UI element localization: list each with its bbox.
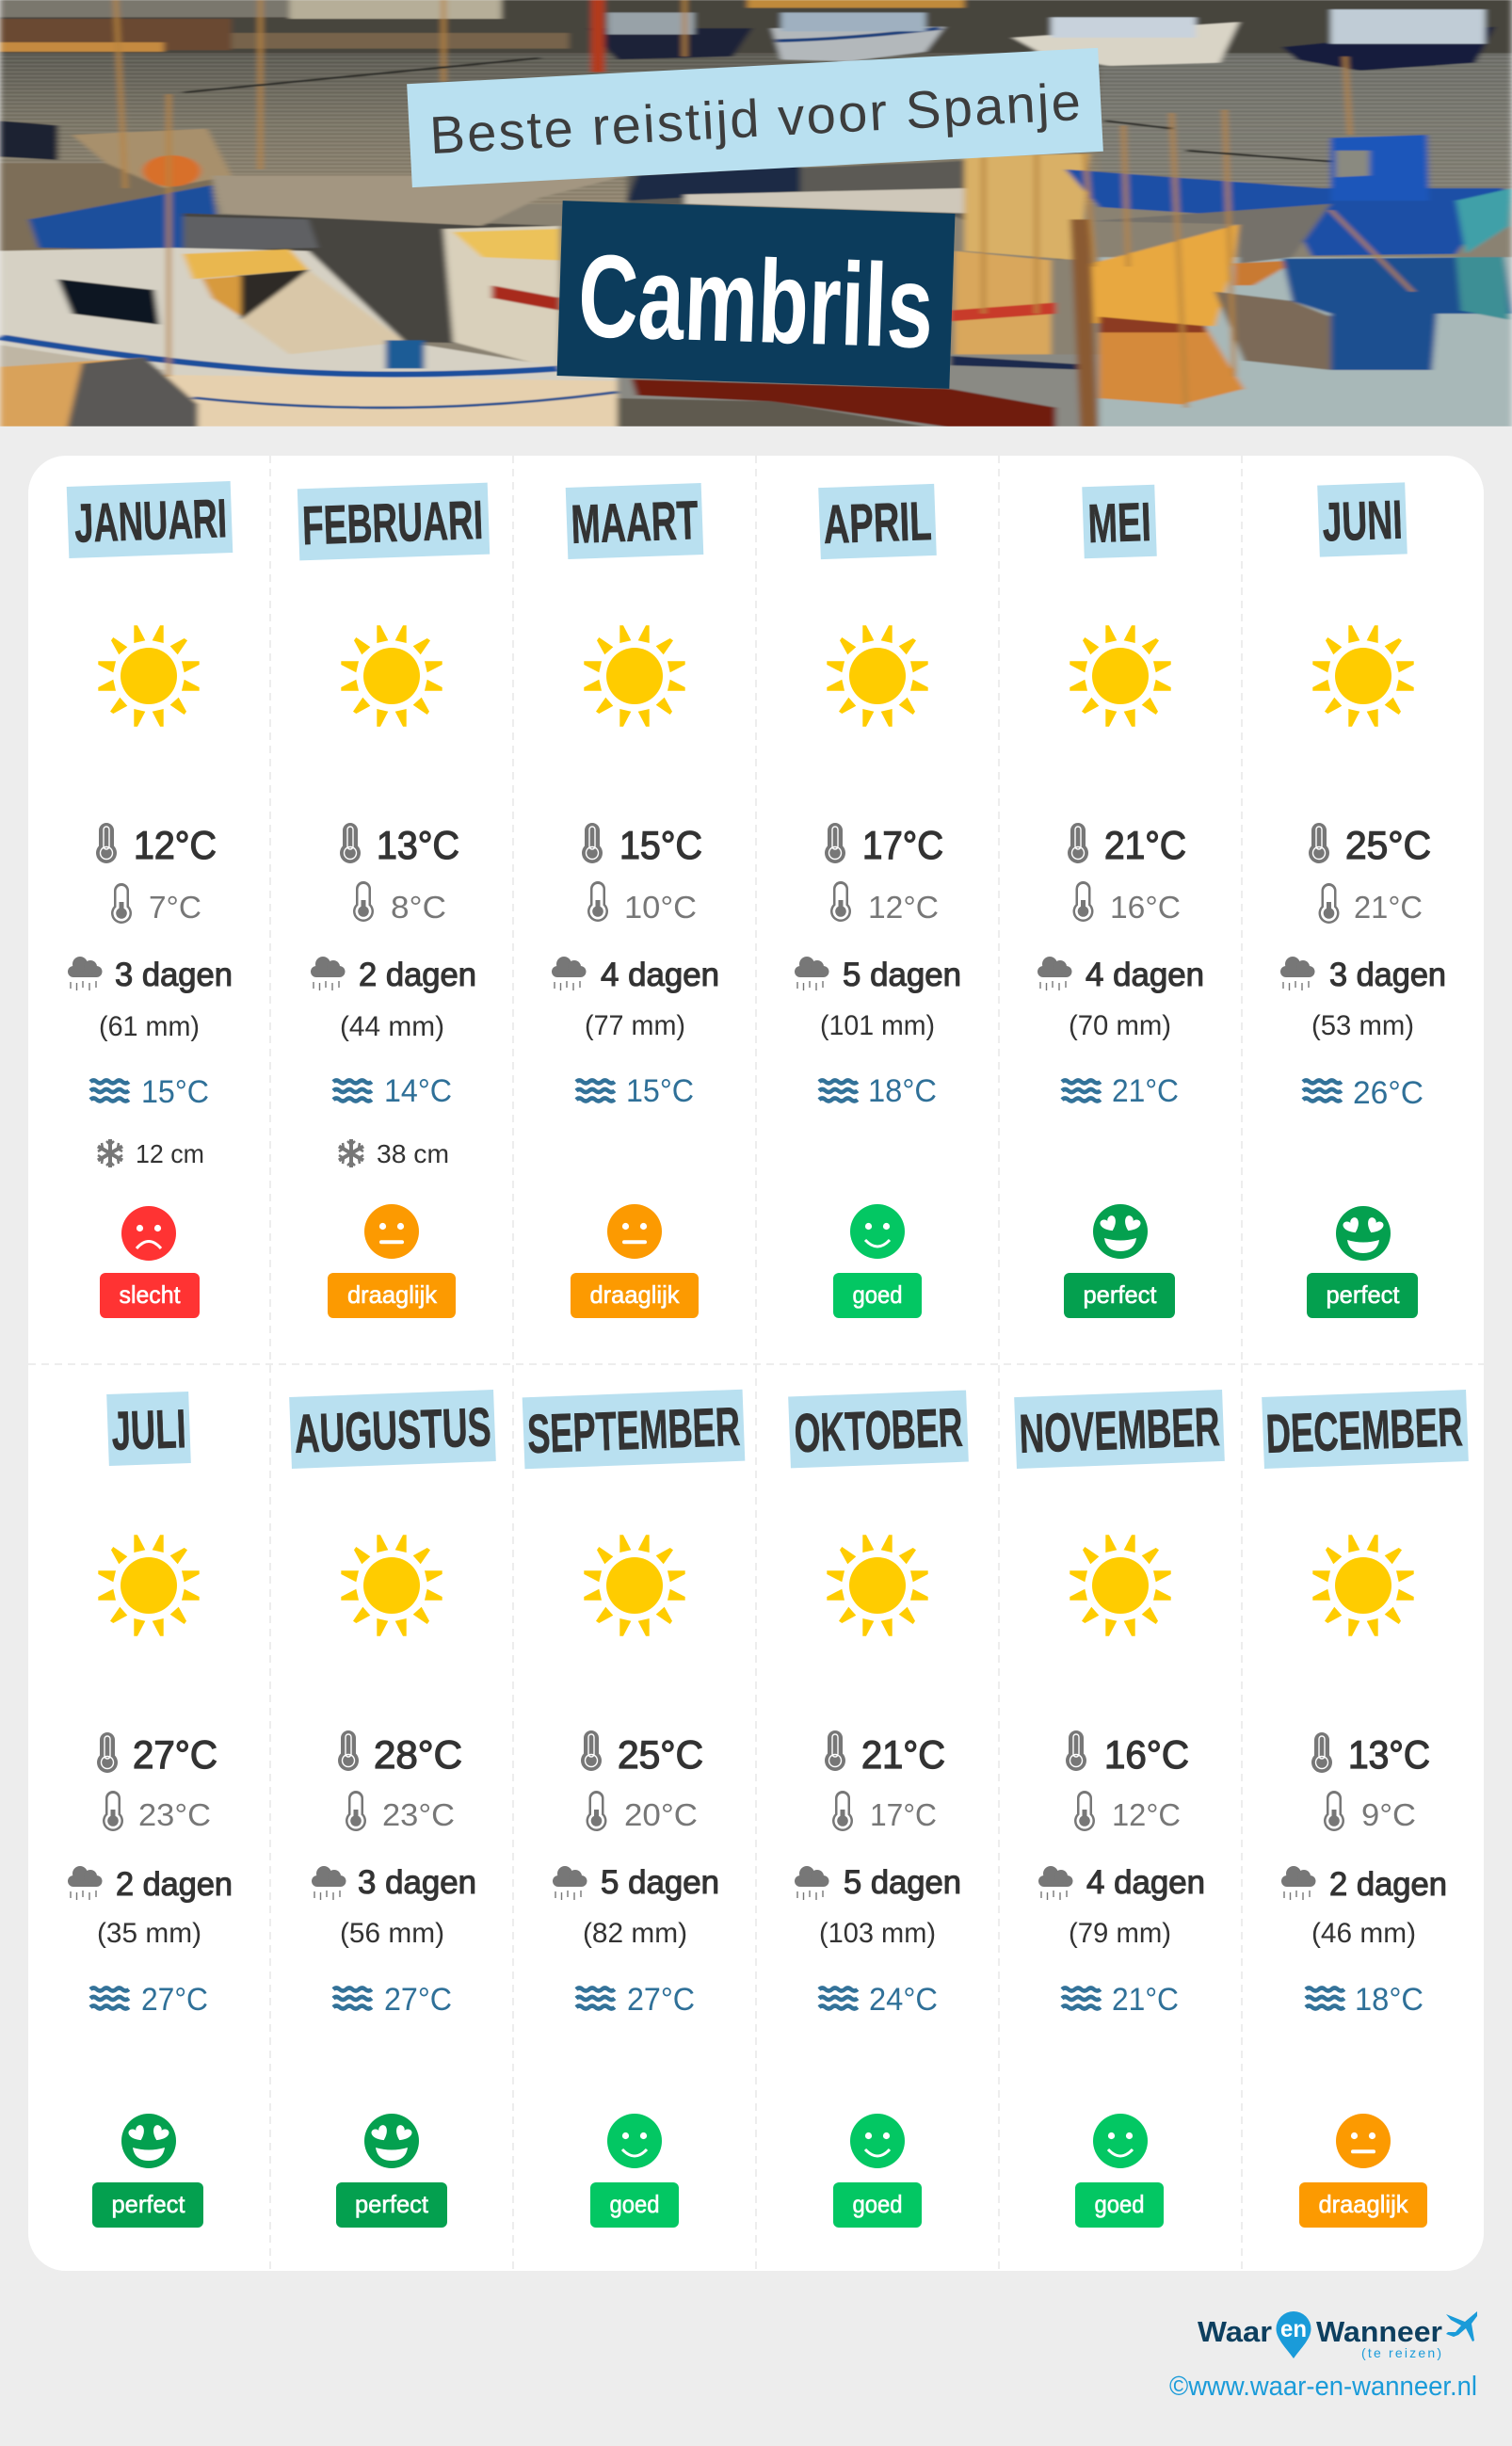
min temperature: 20°C (624, 1797, 698, 1832)
rating: perfect: perfect (1326, 1280, 1400, 1309)
min temperature: 23°C (382, 1797, 455, 1832)
panel: monthly climate table (28, 456, 1484, 2271)
header photo: fishing boats in harbour (0, 0, 1512, 426)
rainfall: (103 mm) (819, 1918, 936, 1949)
icon: sun (1312, 1535, 1414, 1636)
rainfall: (70 mm) (1069, 1010, 1171, 1041)
sea temperature: 21°C (1112, 1073, 1179, 1109)
month heading: januari (67, 481, 233, 558)
rain days: 2 dagen (359, 957, 476, 993)
max temperature: 27°C (133, 1732, 217, 1777)
logo: Waar en Wanneer: (te reizen) (1361, 2345, 1441, 2360)
icon: sun (341, 625, 442, 727)
sea temperature (1062, 1982, 1179, 2018)
column: juni (1280, 482, 1446, 1318)
min temperature (1074, 1791, 1181, 1832)
sea temperature (819, 1073, 937, 1109)
sea temperature (576, 1982, 695, 2018)
max temperature: 25°C (1345, 823, 1431, 867)
min temperature: 7°C (149, 890, 201, 925)
rain days: 5 dagen (601, 1864, 719, 1901)
logo: Waar en Wanneer: Waar (1198, 2315, 1272, 2348)
min temperature: 23°C (138, 1797, 211, 1832)
title banner: Beste reistijd voor Spanje (428, 72, 1082, 165)
icon: sun (584, 1535, 685, 1636)
rain days: 2 dagen (1329, 1866, 1447, 1903)
min temperature (832, 1791, 937, 1832)
min temperature (830, 881, 939, 925)
rain days (68, 1866, 233, 1903)
min temperature: 10°C (624, 890, 697, 925)
sea temperature: 27°C (384, 1982, 452, 2018)
max temperature (338, 1730, 462, 1777)
min temperature: 12°C (868, 890, 939, 925)
sea temperature: 18°C (868, 1073, 937, 1109)
column: september (523, 1390, 745, 2228)
min temperature: 17°C (870, 1797, 937, 1832)
month heading: september: SEPTEMBER (526, 1396, 741, 1465)
rating: draaglijk: draaglijk (1318, 2190, 1408, 2218)
sea temperature: 21°C (1112, 1982, 1179, 2018)
rating: perfect (336, 2114, 447, 2228)
sea temperature: 27°C (627, 1982, 695, 2018)
min temperature (346, 1791, 455, 1832)
month heading: april: APRIL (822, 491, 933, 555)
min temperature (1318, 883, 1423, 925)
month heading: juni: JUNI (1321, 490, 1404, 553)
rating: draaglijk: draaglijk (347, 1280, 438, 1309)
icon: sun (584, 625, 685, 727)
rating: draaglijk (1299, 2114, 1427, 2228)
rating: goed (1075, 2114, 1164, 2228)
min temperature (103, 1791, 211, 1832)
max temperature: 15°C (619, 823, 702, 867)
min temperature (1324, 1791, 1416, 1832)
rating: goed: goed (853, 1280, 902, 1309)
column: januari (67, 481, 233, 1318)
month heading: maart: MAART (570, 490, 700, 555)
rain days: 5 dagen (843, 957, 961, 993)
rating: perfect (1064, 1204, 1175, 1318)
column: februari (298, 483, 490, 1318)
max temperature: 16°C (1104, 1732, 1189, 1777)
max temperature: 13°C (1348, 1732, 1430, 1777)
month heading: november: NOVEMBER (1018, 1396, 1221, 1465)
rainfall: (46 mm) (1311, 1918, 1416, 1949)
month heading: maart (566, 483, 703, 559)
rating: perfect (1307, 1206, 1418, 1318)
min temperature (111, 883, 201, 925)
rain days: 3 dagen (358, 1864, 476, 1901)
max temperature: 21°C (1104, 823, 1186, 867)
rain days (1280, 957, 1446, 993)
sea temperature (1306, 1982, 1424, 2018)
column: mei (1037, 485, 1204, 1318)
column: april (795, 484, 961, 1318)
month heading: juni (1317, 482, 1407, 557)
max temperature (825, 823, 943, 867)
min temperature (353, 881, 446, 925)
sea temperature (333, 1073, 452, 1109)
icon: sun (98, 625, 200, 727)
rain days: 2 dagen (116, 1866, 233, 1903)
sea temperature: 27°C (141, 1982, 208, 2018)
column: november (1014, 1390, 1225, 2228)
logo: Waar en Wanneer: en (1280, 2316, 1307, 2342)
rating: goed: goed (610, 2190, 659, 2218)
rating: perfect (92, 2114, 203, 2228)
rating: goed (833, 1204, 922, 1318)
title banner (407, 48, 1103, 187)
min temperature: 12°C (1112, 1797, 1181, 1832)
month heading: januari: JANUARI (73, 488, 228, 555)
rainfall: (101 mm) (820, 1010, 935, 1041)
max temperature: 12°C (134, 823, 217, 867)
icon: sun (1070, 1535, 1171, 1636)
sea temperature: 26°C (1353, 1075, 1424, 1111)
max temperature (97, 1732, 217, 1777)
icon: sun (98, 1535, 200, 1636)
rating: draaglijk (571, 1204, 699, 1318)
sea temperature: 14°C (384, 1073, 452, 1109)
month heading: oktober: OKTOBER (793, 1397, 964, 1464)
rainfall: (79 mm) (1069, 1918, 1171, 1949)
column: oktober (788, 1391, 969, 2228)
min temperature: 9°C (1361, 1797, 1416, 1832)
max temperature: 13°C (377, 823, 459, 867)
rating: slecht: slecht (119, 1280, 181, 1309)
min temperature: 16°C (1110, 890, 1181, 925)
sea temperature (576, 1073, 694, 1109)
month heading: juli (106, 1392, 191, 1466)
max temperature: 25°C (618, 1732, 703, 1777)
max temperature: 28°C (374, 1732, 462, 1777)
column: juli (68, 1392, 233, 2228)
logo: Waar en Wanneer: Wanneer (1316, 2315, 1442, 2348)
rain days: 4 dagen (601, 957, 719, 993)
column: maart (552, 483, 719, 1318)
min temperature (586, 1791, 698, 1832)
max temperature (1309, 823, 1431, 867)
month heading: oktober (788, 1391, 969, 1468)
column: december (1262, 1390, 1469, 2228)
max temperature: 21°C (861, 1732, 945, 1777)
min temperature (1073, 881, 1181, 925)
month heading: augustus: AUGUSTUS (293, 1396, 492, 1465)
icon: sun (827, 625, 928, 727)
sea temperature: 15°C (626, 1073, 694, 1109)
icon: sun (1312, 625, 1414, 727)
rating: goed (833, 2114, 922, 2228)
month heading: september (523, 1390, 745, 1469)
month heading: mei (1082, 485, 1157, 558)
rain days: 4 dagen (1086, 957, 1204, 993)
rain days: 3 dagen (1329, 957, 1446, 993)
sea temperature (819, 1982, 938, 2018)
max temperature (1066, 1730, 1189, 1777)
sea temperature (1062, 1073, 1179, 1109)
max temperature: 17°C (862, 823, 943, 867)
sea temperature (90, 1074, 209, 1110)
rating: perfect: perfect (1083, 1280, 1157, 1309)
max temperature (581, 1730, 703, 1777)
snow: 38 cm (377, 1139, 449, 1168)
sea temperature: 18°C (1355, 1982, 1424, 2018)
logo: Waar en Wanneer (1198, 2311, 1477, 2360)
snow: 12 cm (136, 1139, 204, 1168)
rainfall: (44 mm) (340, 1011, 444, 1042)
website credit: ©www.waar-en-wanneer.nl (1169, 2372, 1477, 2402)
rainfall: (56 mm) (340, 1918, 444, 1949)
rating: draaglijk: draaglijk (589, 1280, 680, 1309)
sea temperature (333, 1982, 452, 2018)
max temperature (96, 823, 217, 867)
min temperature (587, 881, 697, 925)
month heading: februari (298, 483, 490, 560)
month heading: mei: MEI (1086, 491, 1152, 555)
snow (98, 1139, 204, 1168)
month heading: april (818, 484, 937, 559)
max temperature (582, 823, 702, 867)
snow (339, 1139, 449, 1168)
rain days: 3 dagen (115, 957, 233, 993)
rainfall: (77 mm) (585, 1010, 685, 1041)
rating: goed (590, 2114, 679, 2228)
max temperature (340, 823, 459, 867)
max temperature (1068, 823, 1186, 867)
rain days: 5 dagen (844, 1864, 961, 1901)
icon: sun (827, 1535, 928, 1636)
rating: perfect: perfect (355, 2190, 429, 2218)
max temperature (825, 1730, 945, 1777)
sea temperature: 24°C (869, 1982, 938, 2018)
sea temperature (1303, 1075, 1424, 1111)
rainfall: (35 mm) (97, 1918, 201, 1949)
city name box: Cambrils: Cambrils (576, 231, 935, 373)
rainfall: (53 mm) (1311, 1010, 1414, 1041)
rainfall: (82 mm) (583, 1918, 687, 1949)
month heading: februari: FEBRUARI (301, 490, 484, 556)
icon: sun (1070, 625, 1171, 727)
max temperature (1311, 1732, 1430, 1777)
rating: perfect: perfect (111, 2190, 185, 2218)
rating: slecht (100, 1206, 200, 1318)
min temperature: 21°C (1354, 890, 1423, 925)
min temperature: 8°C (391, 890, 446, 925)
rating: goed: goed (1094, 2190, 1145, 2218)
rain days: 4 dagen (1086, 1864, 1205, 1901)
sea temperature: 15°C (141, 1074, 209, 1110)
sea temperature (90, 1982, 208, 2018)
icon: sun (341, 1535, 442, 1636)
month heading: juli: JULI (110, 1398, 187, 1462)
rainfall: (61 mm) (99, 1011, 200, 1042)
column: augustus (289, 1390, 496, 2228)
city name box: Cambrils (557, 201, 955, 389)
month heading: augustus (289, 1390, 496, 1469)
month heading: november (1014, 1390, 1225, 1469)
rating: draaglijk (328, 1204, 456, 1318)
rating: goed: goed (853, 2190, 902, 2218)
